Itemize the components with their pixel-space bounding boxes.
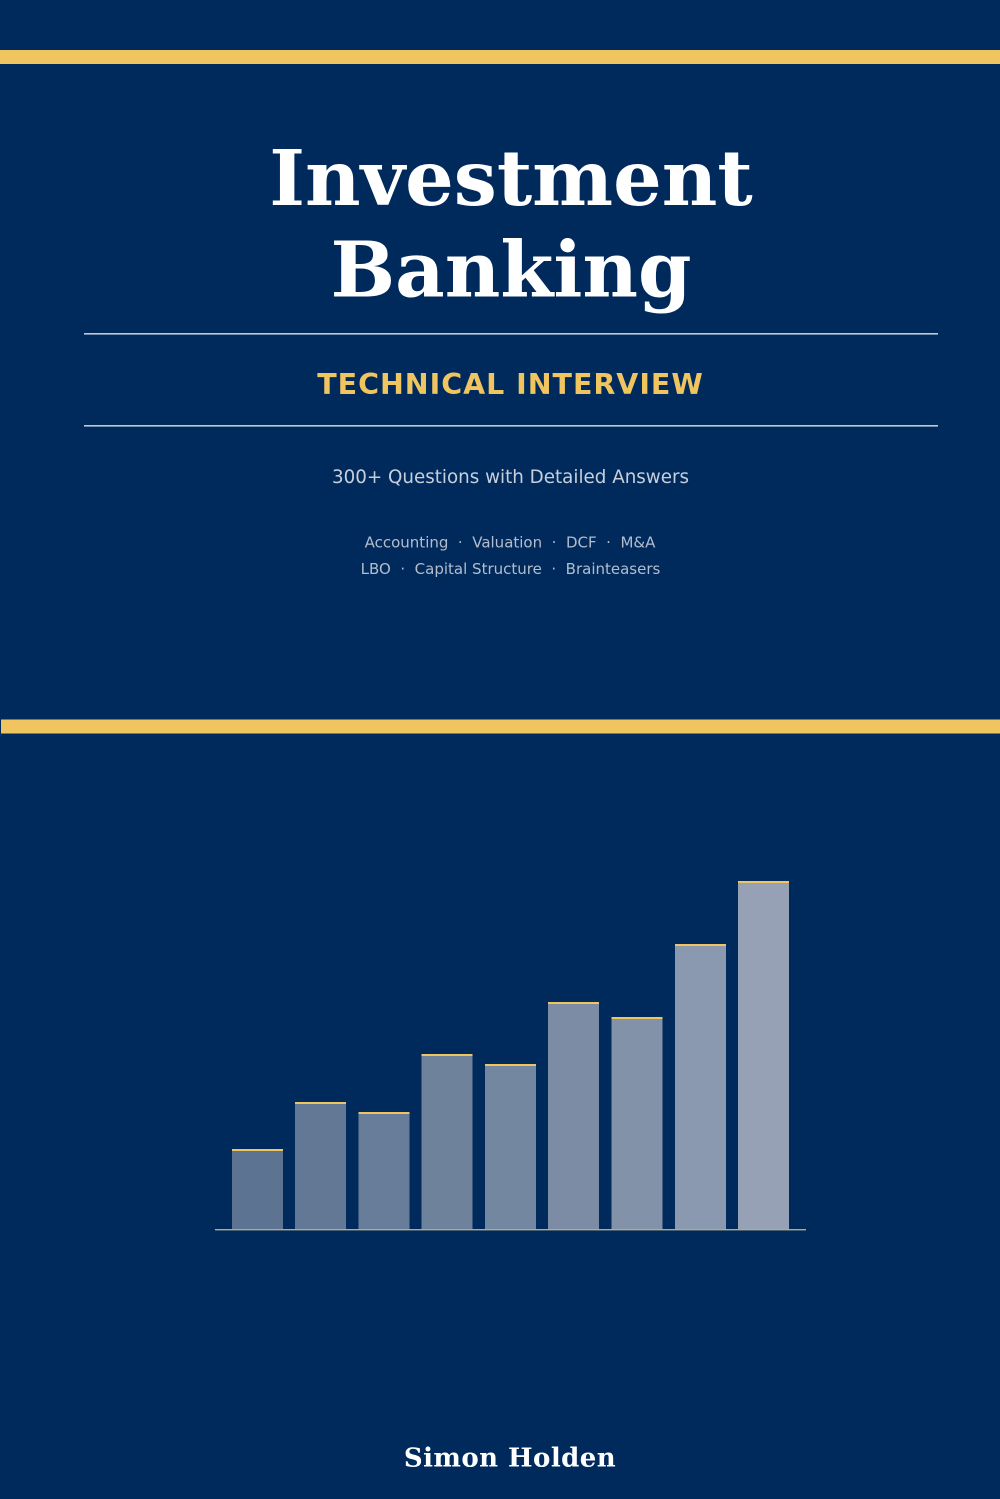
bar chart [215,881,806,1230]
subtitle: TECHNICAL INTERVIEW [317,368,704,401]
bar 9 [738,881,789,1230]
top gold band [0,50,1000,64]
bar 7 [612,1017,662,1230]
lower divider [84,425,938,427]
bar 8 [675,944,726,1230]
bar 4 [422,1054,472,1230]
bar 1 [232,1149,283,1230]
bar 3 [358,1112,410,1230]
title: Investment [269,134,753,224]
chart baseline [215,1229,806,1230]
middle gold band [1,720,1000,734]
author: Simon Holden [404,1444,616,1474]
topics list: Accounting · Valuation · DCF · M&A [365,534,656,552]
topics list [361,534,661,578]
bar 6 [548,1002,599,1230]
title [269,134,753,316]
topics list: LBO · Capital Structure · Brainteasers [361,560,661,578]
bar 2 [295,1102,346,1230]
upper divider [84,333,938,335]
bar 5 [485,1064,536,1230]
tagline: 300+ Questions with Detailed Answers [332,467,689,488]
title: Banking [330,226,692,316]
